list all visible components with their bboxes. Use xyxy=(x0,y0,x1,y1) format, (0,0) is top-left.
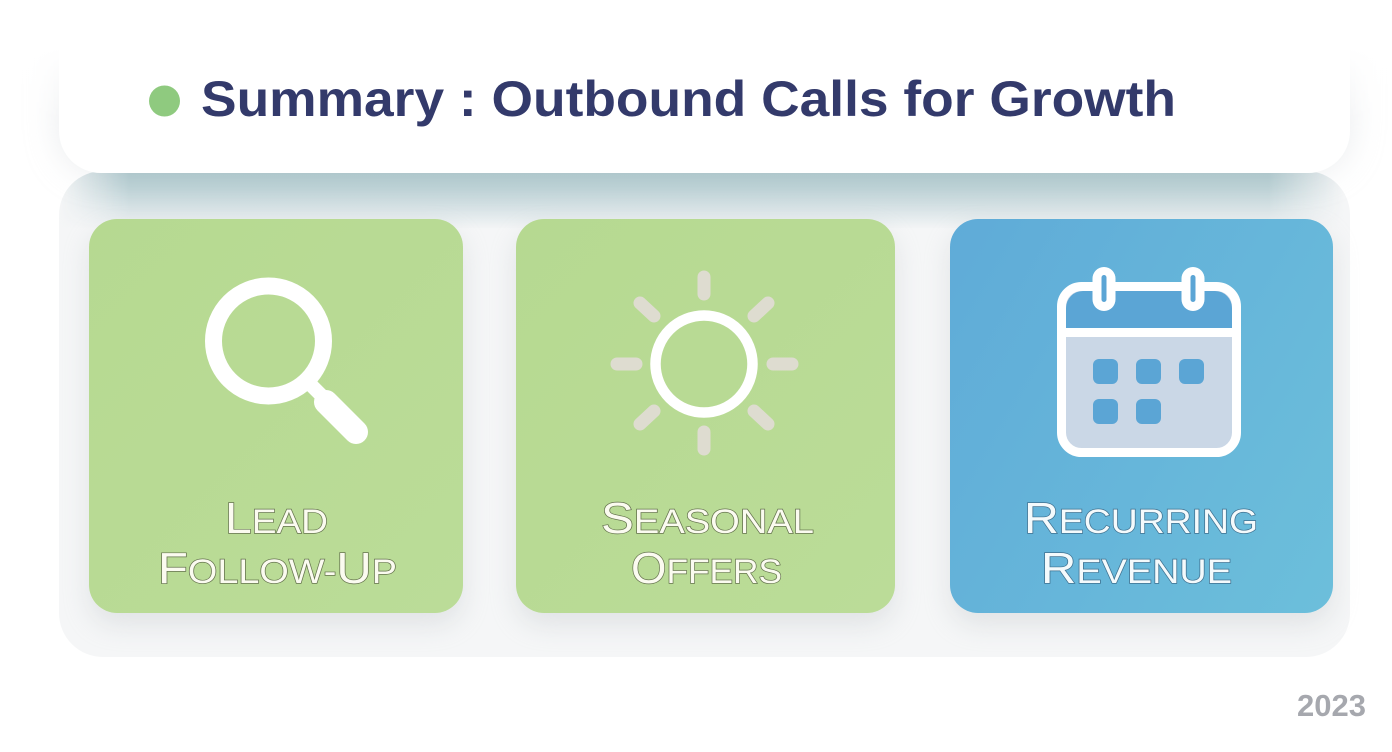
panel: background tray xyxy=(59,171,1350,657)
panel: recurring revenue card xyxy=(950,219,1333,613)
icon: calendar xyxy=(1062,267,1236,452)
panel: seasonal offers card xyxy=(516,219,895,613)
title with bullet xyxy=(149,71,1176,127)
icon: magnifying glass xyxy=(214,286,356,432)
label: lead follow-up: LEAD xyxy=(225,494,328,543)
panel: header xyxy=(59,0,1350,173)
panel: lead follow-up card xyxy=(89,219,463,613)
icon: sun xyxy=(617,277,792,449)
title: Summary : Outbound Calls for Growth xyxy=(201,71,1176,127)
header drop shadow xyxy=(69,172,1334,223)
year label: 2023 xyxy=(1297,688,1366,723)
label: lead follow-up: FOLLOW- UP xyxy=(158,544,397,593)
label: recurring revenue: REVENUE xyxy=(1041,544,1232,593)
label: seasonal offers xyxy=(601,494,814,593)
label: recurring revenue: RECURRING xyxy=(1024,494,1258,543)
icon: green bullet xyxy=(149,86,180,116)
label: seasonal offers: SEASONAL xyxy=(601,494,814,543)
label: lead follow-up xyxy=(158,494,397,593)
label: recurring revenue xyxy=(1024,494,1258,593)
label: seasonal offers: OFFERS xyxy=(631,544,782,593)
